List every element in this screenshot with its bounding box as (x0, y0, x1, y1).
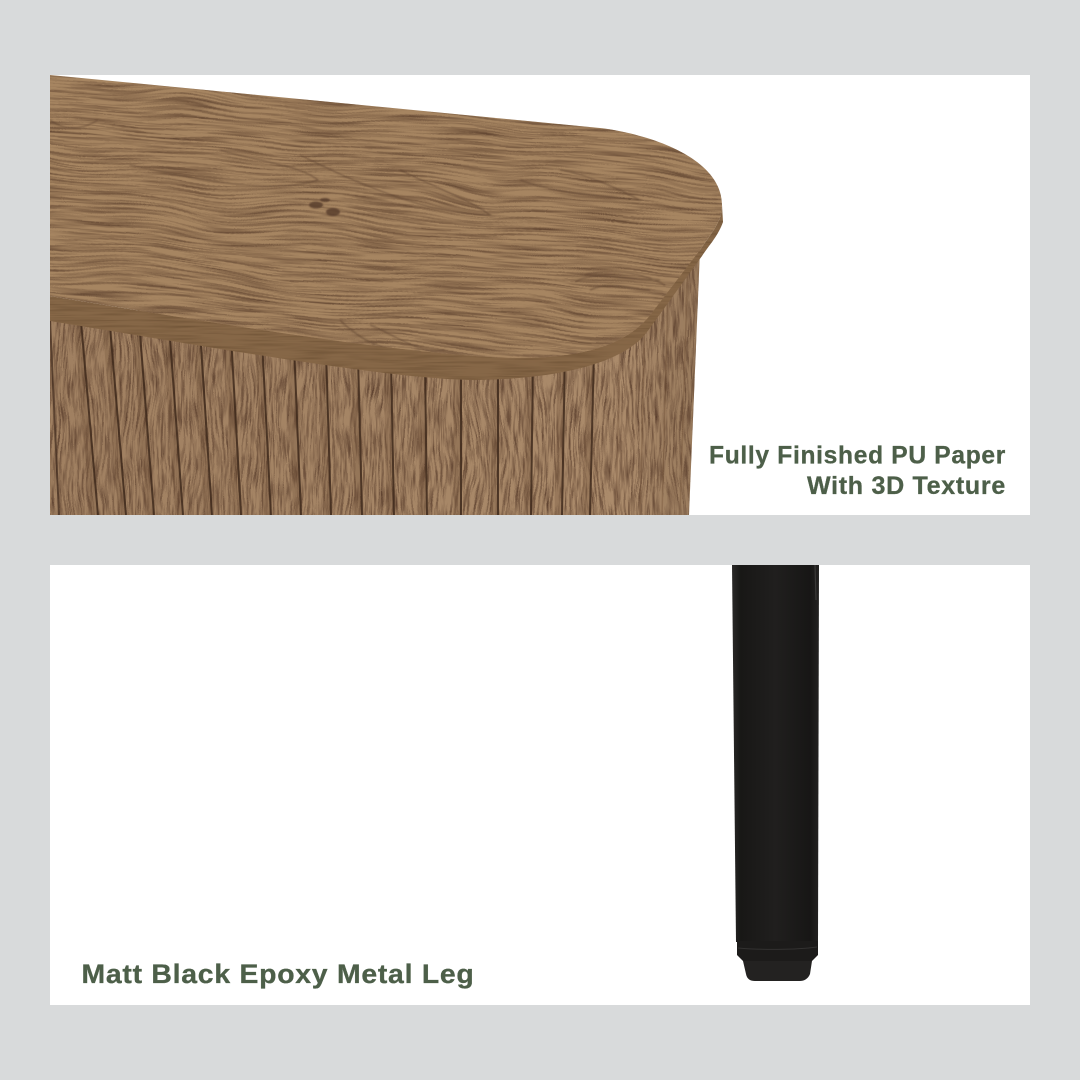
wood knot (309, 198, 340, 216)
panel: metal leg (50, 565, 1030, 1005)
grain swirls (50, 120, 665, 351)
text: wood finish caption: Fully Finished PU Paper (709, 442, 1006, 470)
text: wood finish caption (709, 442, 1006, 500)
black metal leg (732, 565, 819, 981)
table top surface (50, 75, 722, 358)
panel: wood finish (50, 75, 1030, 515)
text: leg caption: Matt Black Epoxy Metal Leg (82, 959, 474, 989)
table top edge (50, 200, 730, 390)
slatted wood body (50, 250, 700, 515)
text: wood finish caption: With 3D Texture (807, 472, 1006, 500)
